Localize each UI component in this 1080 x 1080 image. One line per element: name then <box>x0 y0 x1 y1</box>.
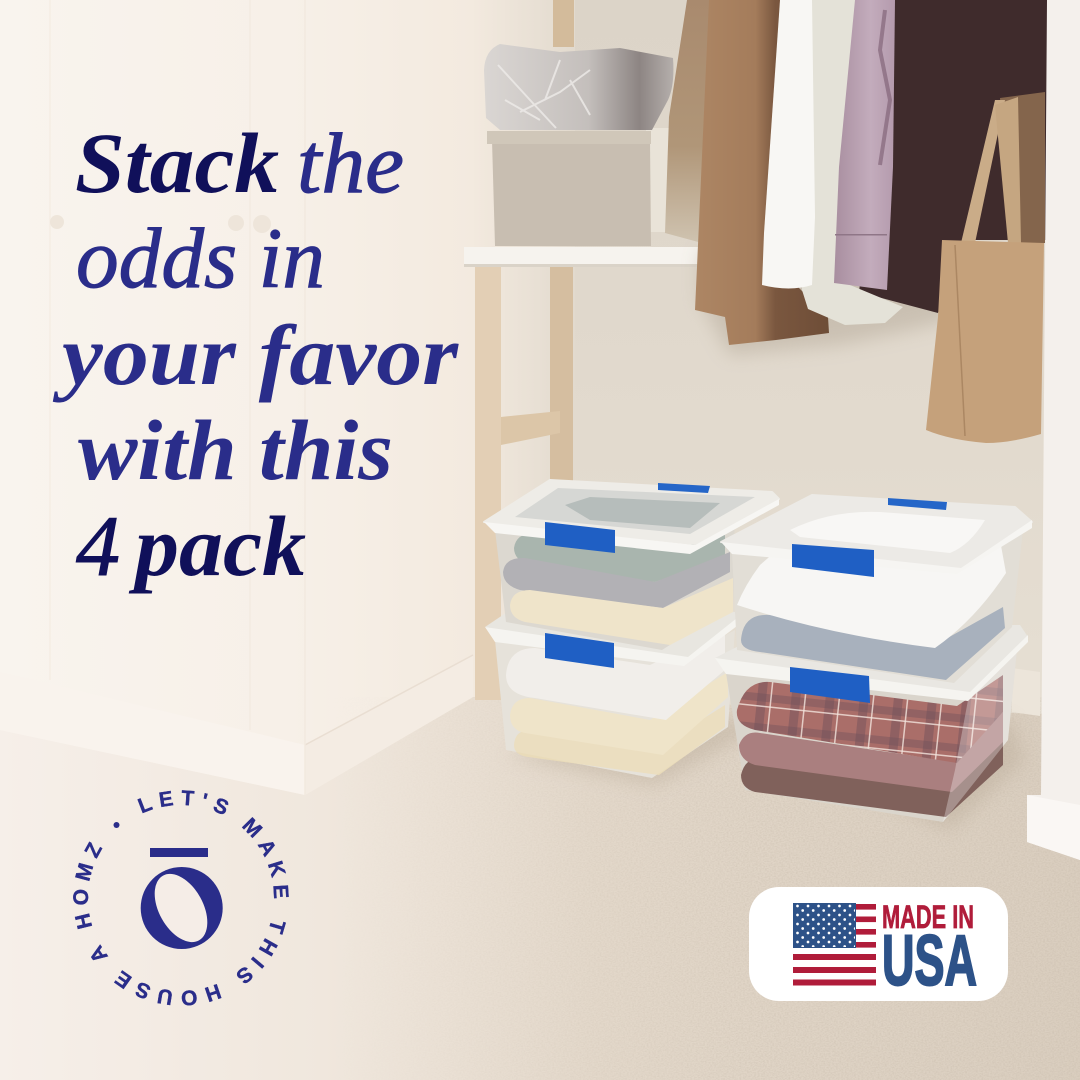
blue-grey blanket <box>741 607 1005 680</box>
soft shadow below hanging clothes <box>700 250 960 355</box>
body <box>495 630 735 778</box>
line: Stack the <box>75 115 404 211</box>
line: 4 pack: pack <box>128 498 306 594</box>
hanging clothes <box>665 0 1047 443</box>
tan knit sweater <box>665 0 712 243</box>
dark brown shirt <box>859 0 1047 313</box>
logo mark <box>141 848 223 951</box>
room background <box>243 0 1080 1080</box>
right wall pillar <box>1027 0 1080 860</box>
body <box>732 530 1023 683</box>
line: Stack the: Stack <box>75 115 279 211</box>
tote bag <box>926 240 1044 443</box>
body <box>726 650 1017 822</box>
cream towel <box>510 672 728 755</box>
bin: lower right <box>715 625 1028 822</box>
MADE IN: MADE IN <box>882 899 974 935</box>
floor shadows under bins <box>505 720 1025 830</box>
cabinet knobs <box>50 215 271 233</box>
bin: upper left <box>484 480 779 650</box>
lid <box>485 590 737 662</box>
headline <box>52 115 460 594</box>
white towel <box>506 630 725 720</box>
separator dot <box>114 822 120 828</box>
clasp <box>790 667 870 703</box>
American flag <box>793 903 876 986</box>
wooden shelf frame <box>475 0 574 700</box>
stacked storage bins <box>484 480 1032 822</box>
line: with this: with this <box>78 402 393 498</box>
line: 4 pack: 4 <box>76 498 120 594</box>
lavender shirt <box>834 0 895 290</box>
shelf <box>464 247 700 267</box>
round logo badge <box>73 790 289 1006</box>
white shirt <box>762 0 815 288</box>
lower cream towel <box>514 705 725 775</box>
side panel haze <box>943 650 1017 822</box>
front clasp <box>545 522 615 553</box>
brown blanket <box>741 735 1003 817</box>
cream shirt <box>802 0 903 325</box>
circular tagline: LET'S MAKE THIS HOUSE A HOMZ <box>73 790 289 1006</box>
body <box>495 510 735 650</box>
lid <box>484 480 779 544</box>
plaid blanket <box>737 675 1003 763</box>
back clasp <box>658 483 710 493</box>
grey towel <box>503 552 730 608</box>
cream towel <box>510 578 733 645</box>
mauve blanket <box>739 712 1003 792</box>
front clasp <box>792 544 874 577</box>
bin: upper right <box>721 495 1032 683</box>
line: odds in: odds in <box>76 210 325 306</box>
lid <box>715 625 1028 694</box>
Made in USA badge <box>749 887 1008 1001</box>
brown coat <box>695 0 829 345</box>
white pillow <box>737 530 1006 648</box>
back clasp <box>888 498 947 510</box>
tote handle <box>961 92 1045 243</box>
lid <box>721 495 1032 570</box>
clasp <box>545 633 614 668</box>
line: your favor: your favor <box>52 307 460 403</box>
USA: USA <box>882 922 977 1001</box>
line: Stack the: the <box>297 115 404 211</box>
sage towel <box>514 533 725 582</box>
storage box and plastic bag on shelf <box>484 44 673 246</box>
bin: lower left <box>485 590 737 778</box>
